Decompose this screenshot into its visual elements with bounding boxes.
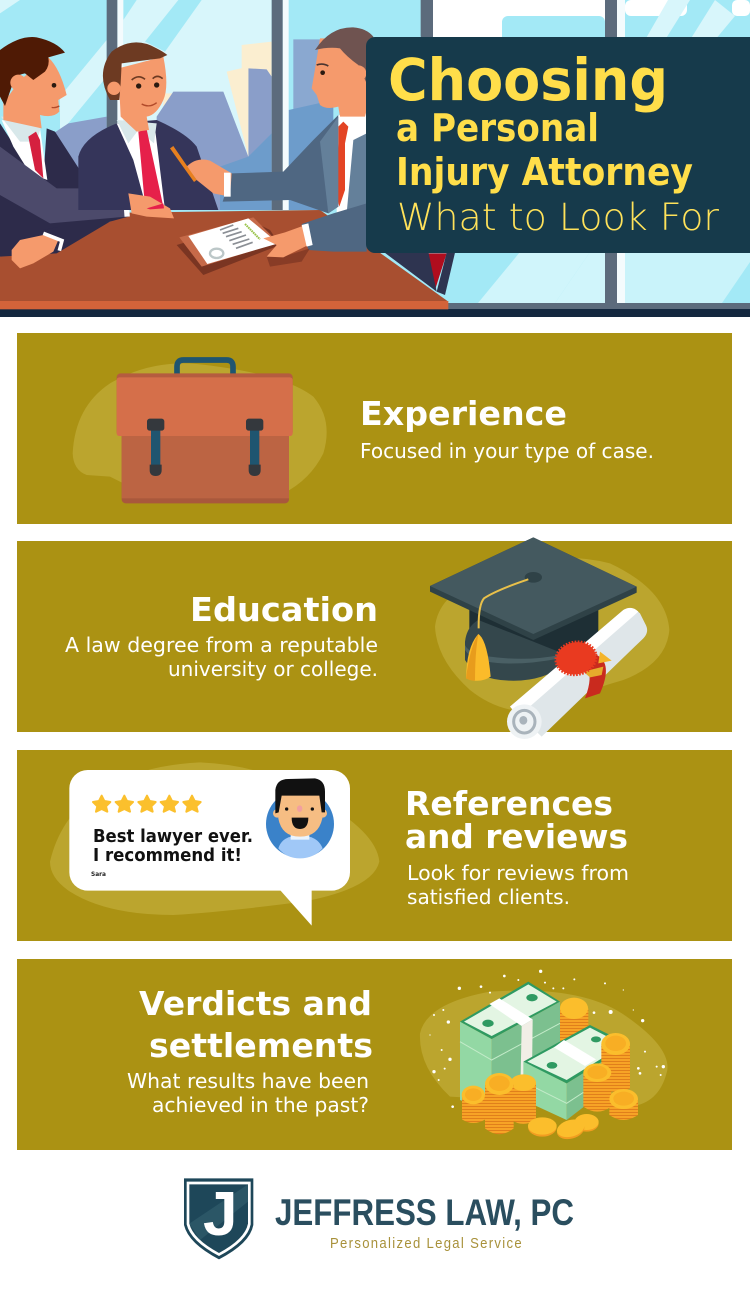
- left man: [0, 123, 128, 257]
- text: education description: A law degree from a reputable: [65, 633, 378, 657]
- heading: Education: Education: [190, 590, 378, 629]
- icon: graduation cap and diploma: [430, 537, 669, 739]
- text: verdicts description: What results have been: [127, 1069, 369, 1093]
- title line: Injury Attorney: Injury Attorney: [396, 150, 693, 194]
- tagline: Personalized Legal Service: [330, 1235, 523, 1252]
- panel: references and reviews: [17, 750, 732, 941]
- text: verdicts description: [127, 1069, 369, 1117]
- heading: verdicts and settlements: Verdicts and: [139, 984, 372, 1023]
- icon: shield: [184, 1178, 253, 1259]
- heading: references and reviews: References: [405, 784, 613, 823]
- title line: a Personal: a Personal: [396, 106, 599, 150]
- heading: references and reviews: [405, 784, 628, 856]
- company name: JEFFRESS LAW, PC: [275, 1192, 574, 1233]
- panel: education: [17, 537, 732, 739]
- right man: [337, 113, 367, 213]
- icon: money stacks and coins: [420, 970, 667, 1142]
- heading: verdicts and settlements: [139, 984, 373, 1065]
- icon: shield: J: [203, 1180, 237, 1249]
- title box: [366, 37, 750, 253]
- text: experience description: Focused in your type of case.: [360, 439, 654, 463]
- title line: Choosing: Choosing: [388, 46, 668, 114]
- panel: experience: [17, 333, 732, 524]
- heading: Experience: Experience: [360, 394, 567, 433]
- header illustration: attorney meeting: [0, 0, 750, 317]
- logo: Jeffress Law: [184, 1178, 574, 1259]
- text: references description: satisfied clients.: [407, 885, 570, 909]
- right windows: [433, 0, 605, 40]
- clipboard: [177, 222, 280, 275]
- icon: review speech bubble: [50, 762, 379, 926]
- review text: Best lawyer ever.: [93, 827, 253, 847]
- panel: verdicts and settlements: [17, 959, 732, 1150]
- middle man: [78, 120, 218, 210]
- heading: verdicts and settlements: settlements: [149, 1026, 373, 1065]
- heading: references and reviews: and reviews: [405, 817, 628, 856]
- text: references description: Look for reviews from: [407, 861, 629, 885]
- text: references description: [407, 861, 629, 909]
- icon: review speech bubble: I recommend it!: [93, 846, 242, 866]
- title line: What to Look For: What to Look For: [397, 196, 720, 239]
- text: education description: [65, 633, 378, 681]
- icon: briefcase: [73, 360, 327, 503]
- text: education description: university or college.: [168, 657, 378, 681]
- text: verdicts description: achieved in the past?: [152, 1093, 369, 1117]
- icon: review speech bubble: Sara: [91, 871, 106, 878]
- table: [0, 210, 448, 302]
